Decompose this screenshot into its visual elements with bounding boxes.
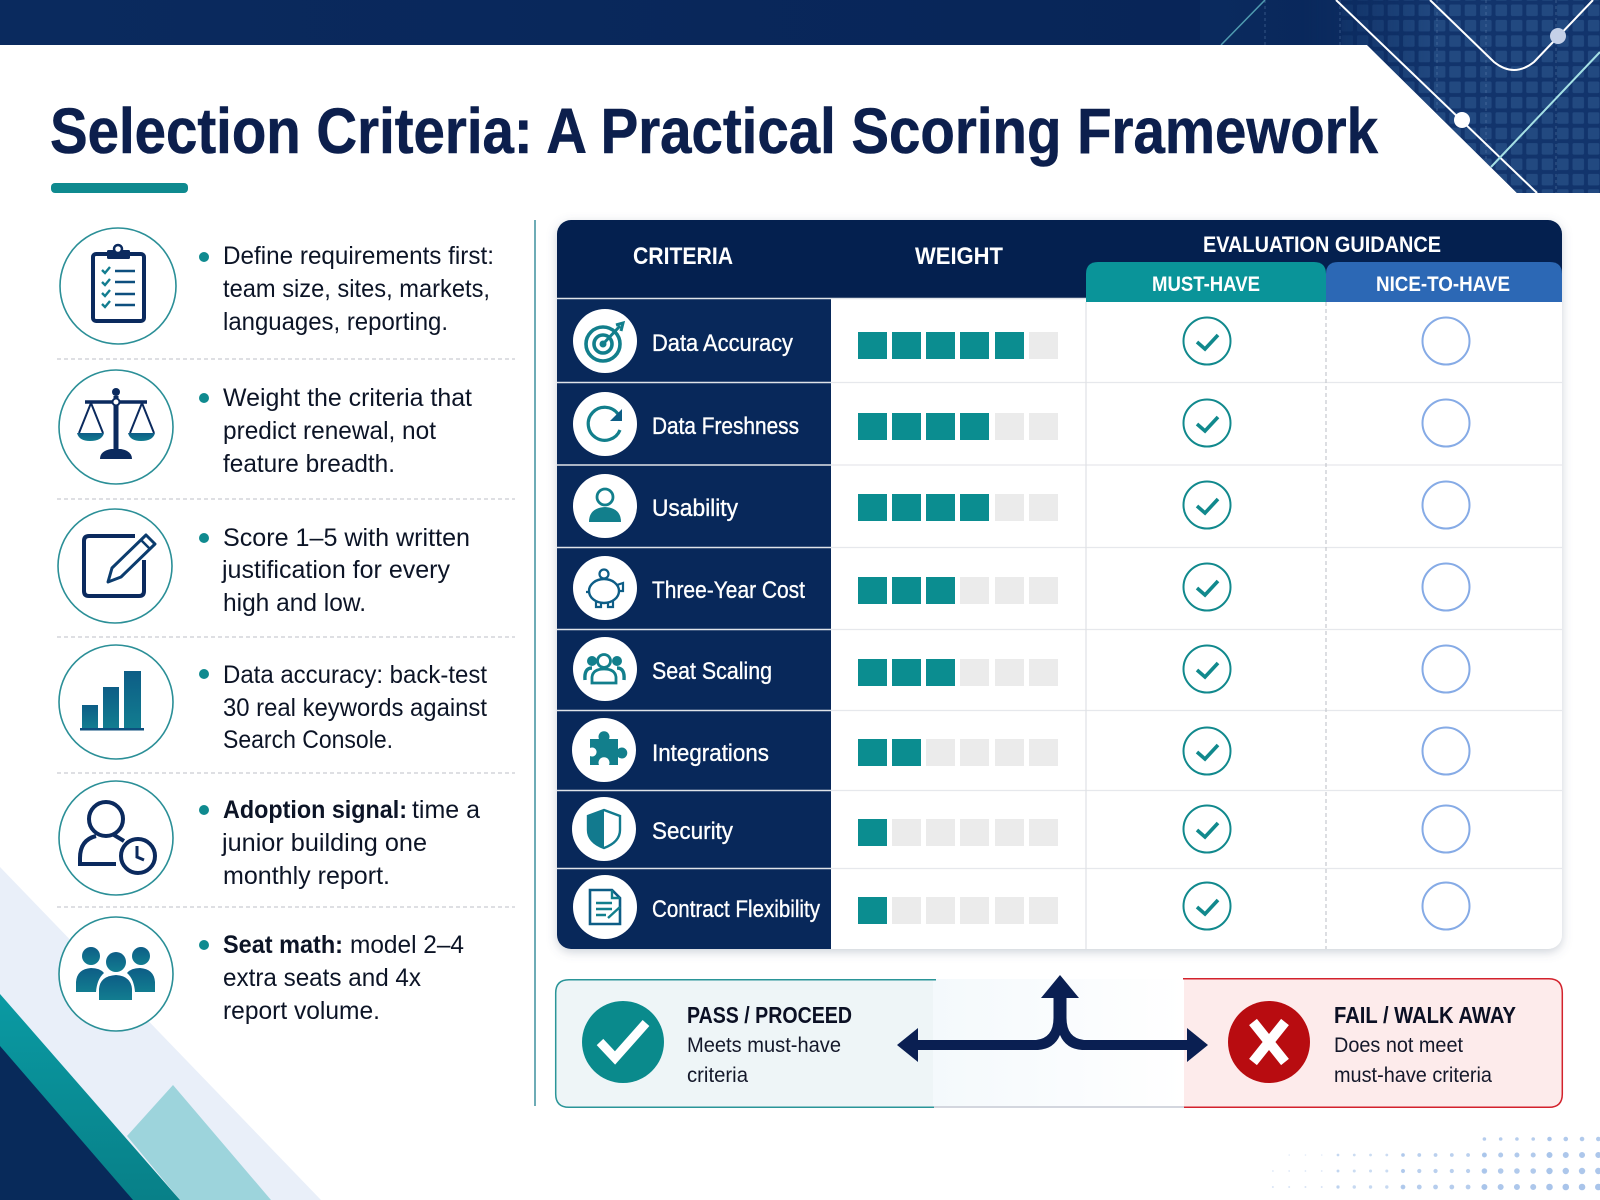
step 6: seat math	[59, 917, 464, 1031]
step 4: back-test data accuracy: 30 real keywords against	[223, 694, 487, 722]
left column: selection steps	[57, 228, 515, 1031]
criteria scoring table	[557, 220, 1562, 949]
row: contract flexibility: Contract Flexibility	[652, 896, 821, 923]
step 2: weight criteria: predict renewal, not	[223, 417, 436, 445]
row: data accuracy	[573, 309, 1470, 373]
nice-to-have tab: NICE-TO-HAVE	[1376, 273, 1510, 296]
nice-to-have tab	[1326, 262, 1562, 302]
step 1: define requirements: Define requirements first:	[223, 242, 494, 270]
step 5: adoption signal	[59, 781, 480, 895]
step 6: seat math: Seat math:	[223, 931, 343, 959]
row: integrations: Integrations	[652, 740, 769, 767]
row: three-year cost: Three-Year Cost	[652, 577, 805, 604]
step 1: define requirements	[60, 228, 494, 344]
fail / walk away: FAIL / WALK AWAY	[1334, 1002, 1516, 1028]
step 1: define requirements: team size, sites, markets,	[223, 275, 490, 303]
step 3: score with justification: justification for every	[221, 556, 450, 584]
row: integrations	[572, 718, 1470, 782]
step 2: weight criteria: Weight the criteria that	[223, 384, 472, 412]
step 6: seat math: model 2–4	[350, 931, 464, 959]
step 6: seat math: report volume.	[223, 997, 380, 1025]
row: three-year cost	[573, 556, 1470, 620]
pass / proceed: criteria	[687, 1064, 748, 1087]
pass / proceed: PASS / PROCEED	[687, 1002, 852, 1028]
row: seat scaling	[573, 637, 1470, 701]
step 3: score with justification	[58, 509, 470, 623]
row: data freshness	[573, 392, 1470, 456]
must-have tab: MUST-HAVE	[1152, 273, 1260, 296]
step 3: score with justification: high and low.	[223, 589, 366, 617]
step 6: seat math: extra seats and 4x	[223, 964, 421, 992]
row: contract flexibility	[573, 875, 1470, 939]
step 4: back-test data accuracy	[59, 645, 487, 759]
fail / walk away	[1228, 1001, 1516, 1087]
row: security	[572, 797, 1470, 861]
bottom-left decorative triangles	[0, 867, 321, 1200]
table header: evaluation guidance: EVALUATION GUIDANCE	[1203, 232, 1441, 257]
step 1: define requirements: languages, reporting.	[223, 308, 448, 336]
pass / proceed	[582, 1001, 852, 1087]
step 4: back-test data accuracy: Data accuracy: back-test	[223, 661, 487, 689]
pass / proceed: Meets must-have	[687, 1034, 841, 1057]
vertical divider	[534, 220, 536, 1106]
step 5: adoption signal: time a	[412, 796, 480, 824]
fail / walk away: Does not meet	[1334, 1034, 1463, 1057]
decision outcome panel	[555, 975, 1563, 1108]
row: usability	[573, 474, 1470, 538]
table header: criteria: CRITERIA	[633, 243, 733, 270]
title underline	[51, 183, 188, 193]
bottom-right dot pattern	[1273, 1139, 1600, 1187]
title: Selection Criteria: A Practical Scoring Framework	[50, 95, 1378, 167]
table header: weight: WEIGHT	[915, 243, 1003, 270]
header band with tech grid corner	[0, 0, 1600, 200]
decision arrows	[897, 975, 1208, 1062]
fail / walk away: must-have criteria	[1334, 1064, 1492, 1087]
must-have tab	[1086, 262, 1326, 302]
step 4: back-test data accuracy: Search Console.	[223, 726, 393, 754]
row: data accuracy: Data Accuracy	[652, 330, 794, 357]
row: usability: Usability	[652, 495, 739, 522]
step 5: adoption signal: monthly report.	[223, 862, 390, 890]
step 2: weight criteria: feature breadth.	[223, 450, 395, 478]
step 3: score with justification: Score 1–5 with written	[223, 524, 470, 552]
row: data freshness: Data Freshness	[652, 413, 799, 440]
row: security: Security	[652, 818, 734, 845]
step 5: adoption signal: Adoption signal:	[223, 796, 407, 824]
step 2: weight criteria	[59, 370, 472, 484]
step 5: adoption signal: junior building one	[221, 829, 427, 857]
row: seat scaling: Seat Scaling	[652, 658, 772, 685]
